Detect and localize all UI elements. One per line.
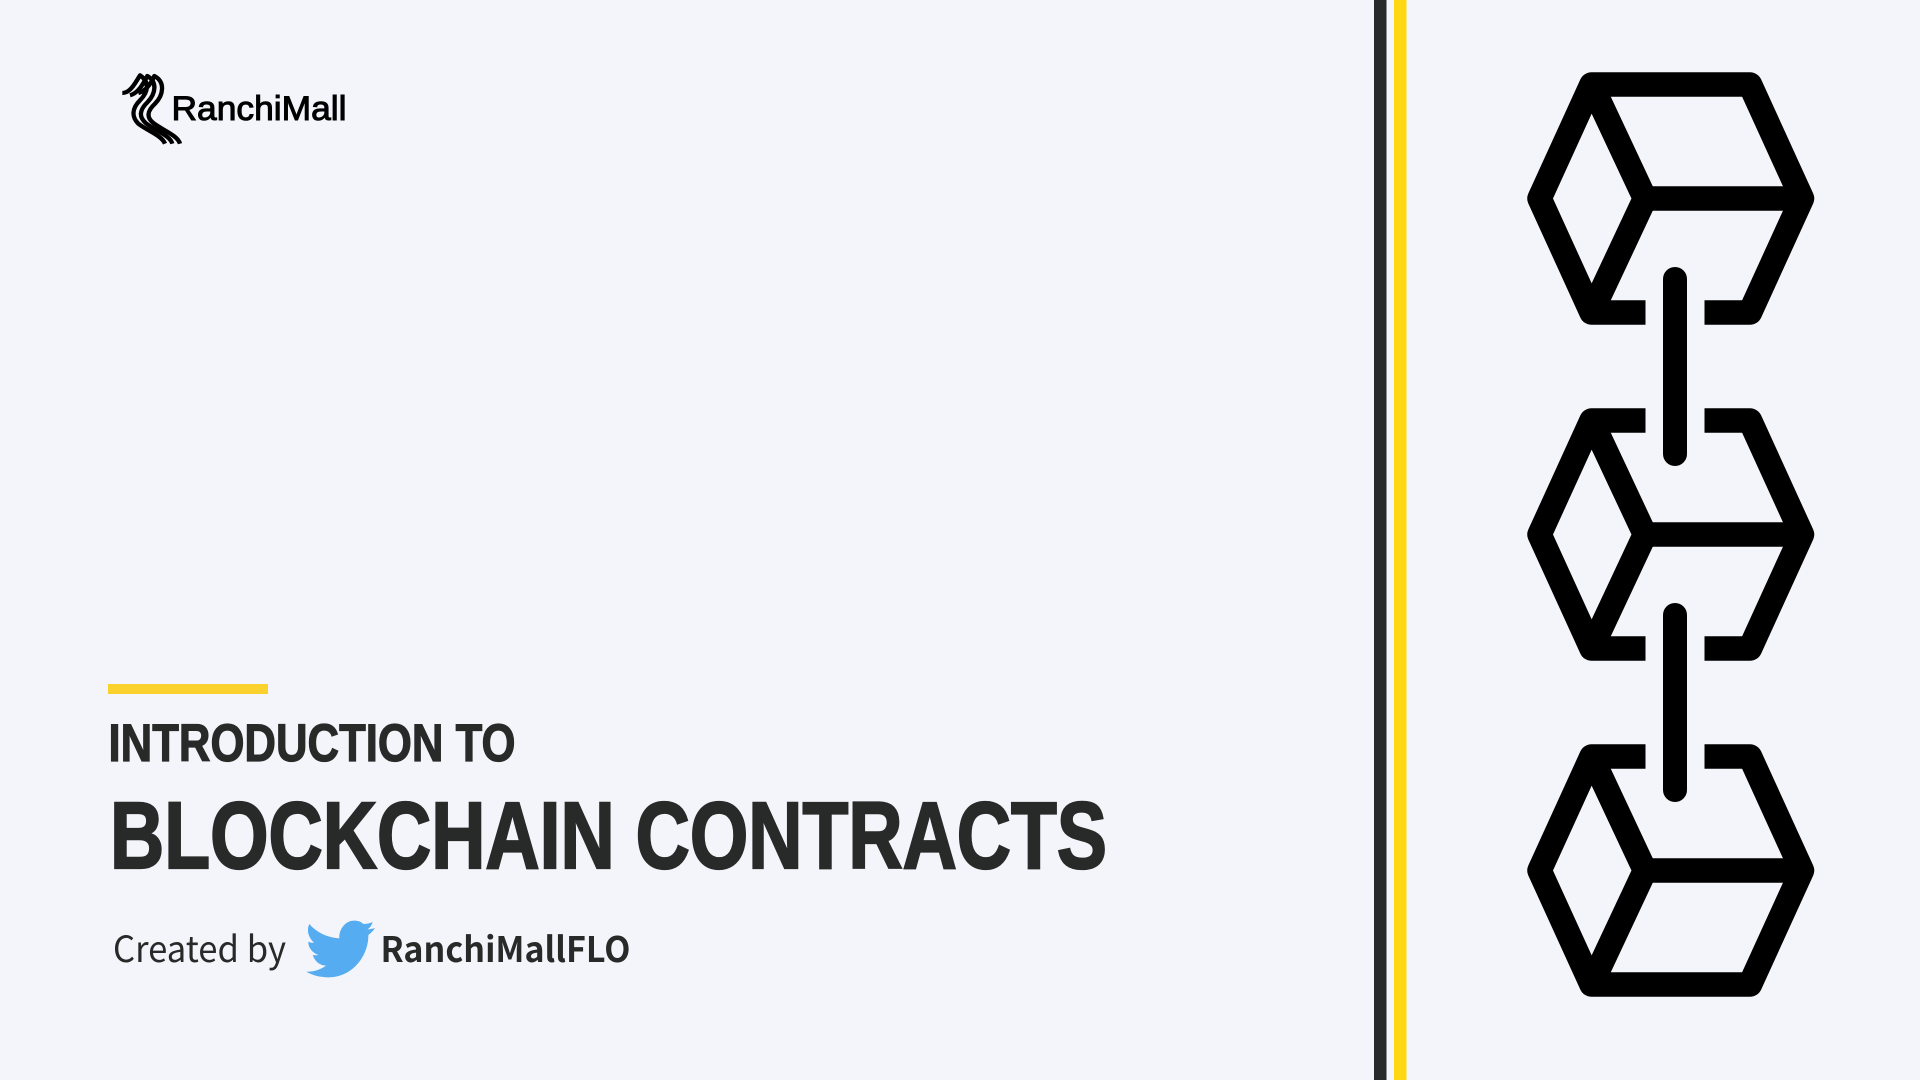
icon: blockchain <box>1540 84 1802 984</box>
heading: introduction to: INTRODUCTION TO <box>108 714 516 773</box>
link 2 <box>1663 615 1687 790</box>
title: blockchain contracts: BLOCKCHAIN CONTRACTS <box>110 783 1107 889</box>
block 1 <box>1540 84 1802 312</box>
icon: twitter bird <box>306 921 375 977</box>
credit line <box>113 921 630 977</box>
divider: dark stripe <box>1374 0 1386 1080</box>
divider: yellow stripe <box>1394 0 1406 1080</box>
logo: RanchiMall <box>122 75 347 144</box>
accent bar <box>108 684 268 694</box>
link 1 <box>1663 279 1687 454</box>
created by label: Created by <box>113 921 286 973</box>
icon: ribbon horse <box>122 75 180 144</box>
block 3 <box>1540 756 1802 984</box>
twitter handle: RanchiMallFLO <box>380 922 630 973</box>
logo wordmark: RanchiMall <box>172 90 346 128</box>
block 2 <box>1540 420 1802 648</box>
